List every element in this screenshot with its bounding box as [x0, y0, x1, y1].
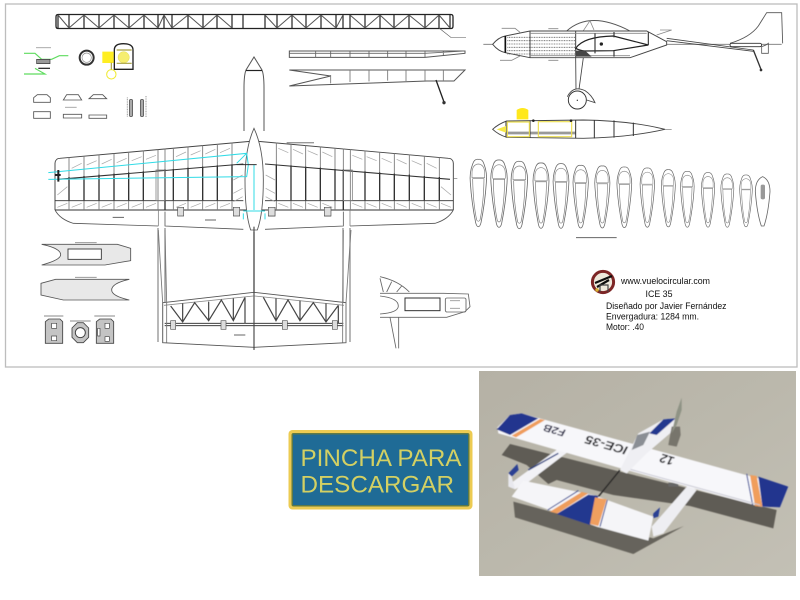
main wing — [48, 128, 457, 230]
bottom view with yellow engine — [493, 120, 665, 138]
yellow engine former — [114, 44, 133, 69]
plate 2 — [41, 279, 129, 300]
engine and propeller — [668, 427, 681, 447]
button: download: DESCARGAR — [300, 472, 454, 498]
fuselage and cowl — [620, 418, 677, 473]
booms — [508, 445, 568, 489]
photo: model aircraft — [479, 371, 796, 576]
wing lettering: 12 — [658, 451, 676, 468]
tail shadow — [513, 502, 684, 554]
text block: credits: Diseñado por Javier Fernández — [606, 300, 727, 311]
small parts group — [24, 44, 146, 118]
green control parts — [24, 53, 68, 74]
text block: credits: Motor: .40 — [606, 321, 644, 332]
wing shadow — [502, 444, 777, 528]
tailplane — [163, 292, 346, 347]
bulkheads — [45, 319, 63, 343]
wing ribs and fuselage side views — [289, 51, 465, 104]
button: download: PINCHA PARA — [300, 446, 462, 472]
logo: vuelo circular — [592, 271, 614, 293]
side view fuselage — [483, 13, 783, 138]
cyan control lines — [48, 153, 265, 219]
rear strut — [668, 483, 678, 487]
text block: credits: ICE 35 — [646, 288, 672, 299]
top wing truss — [56, 14, 466, 38]
text block: credits: www.vuelocircular.com — [620, 275, 710, 286]
panel: plan sheet — [6, 4, 797, 367]
lower left parts and tailplane — [41, 227, 351, 348]
aircraft with shadows — [497, 398, 788, 554]
text block: credits — [606, 275, 727, 332]
plate 1 — [42, 244, 131, 265]
top view fuselage and booms — [158, 57, 350, 350]
wing lettering — [542, 421, 676, 468]
wing lettering: ICE-35 — [583, 432, 629, 458]
wing lettering: F2B — [542, 421, 567, 438]
fuselage formers row — [470, 159, 770, 238]
main wing — [497, 413, 788, 507]
fuselage detail — [380, 277, 470, 348]
text block: credits: Envergadura: 1284 mm. — [606, 310, 699, 322]
tailplane — [512, 481, 653, 541]
button: download — [288, 430, 472, 510]
